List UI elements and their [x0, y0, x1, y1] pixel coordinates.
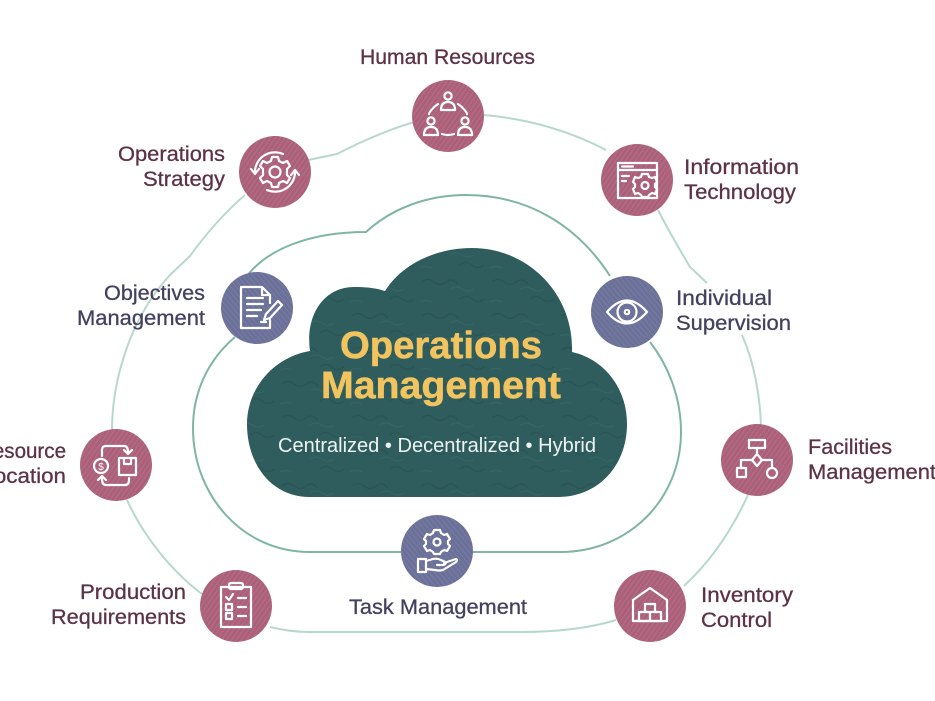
node: Information Technology: Information: [684, 155, 799, 179]
node: Operations Strategy: Operations: [118, 142, 225, 166]
node: Information Technology: [601, 144, 799, 216]
title: [321, 325, 561, 407]
node: Objectives Management: [77, 272, 293, 344]
node: Human Resources: Human Resources: [360, 45, 535, 69]
node: Resource Allocation: [0, 429, 152, 501]
node: Information Technology: Technology: [684, 180, 796, 204]
title: Management: [321, 365, 561, 407]
node: Operations Strategy: [118, 136, 311, 208]
node: Task Management: [349, 515, 527, 619]
node: Human Resources: [360, 45, 535, 152]
outer ring connector: [112, 115, 761, 632]
node: Facilities Management: Management: [808, 460, 935, 484]
node: Production Requirements: [51, 570, 272, 642]
node: Operations Strategy: Strategy: [143, 167, 225, 191]
node: Facilities Management: Facilities: [808, 435, 892, 459]
inner cloud outline: [193, 195, 681, 552]
subtitle: Centralized • Decentralized • Hybrid: [278, 434, 596, 457]
node: Facilities Management: [721, 424, 935, 496]
node: Individual Supervision: Individual: [676, 286, 772, 310]
node: Objectives Management: Objectives: [104, 281, 205, 305]
title: Operations: [340, 325, 542, 367]
central cloud: [247, 248, 627, 497]
node: Inventory Control: Control: [701, 608, 772, 632]
node: Production Requirements: Requirements: [51, 605, 186, 629]
node: Objectives Management: Management: [77, 306, 205, 330]
node: Individual Supervision: Supervision: [676, 311, 791, 335]
node: Task Management: Task Management: [349, 595, 527, 619]
node: Inventory Control: [614, 570, 793, 642]
node: Inventory Control: Inventory: [701, 583, 793, 607]
node: Production Requirements: Production: [80, 580, 186, 604]
node: Resource Allocation: $: [98, 462, 104, 473]
node: Individual Supervision: [591, 276, 791, 348]
